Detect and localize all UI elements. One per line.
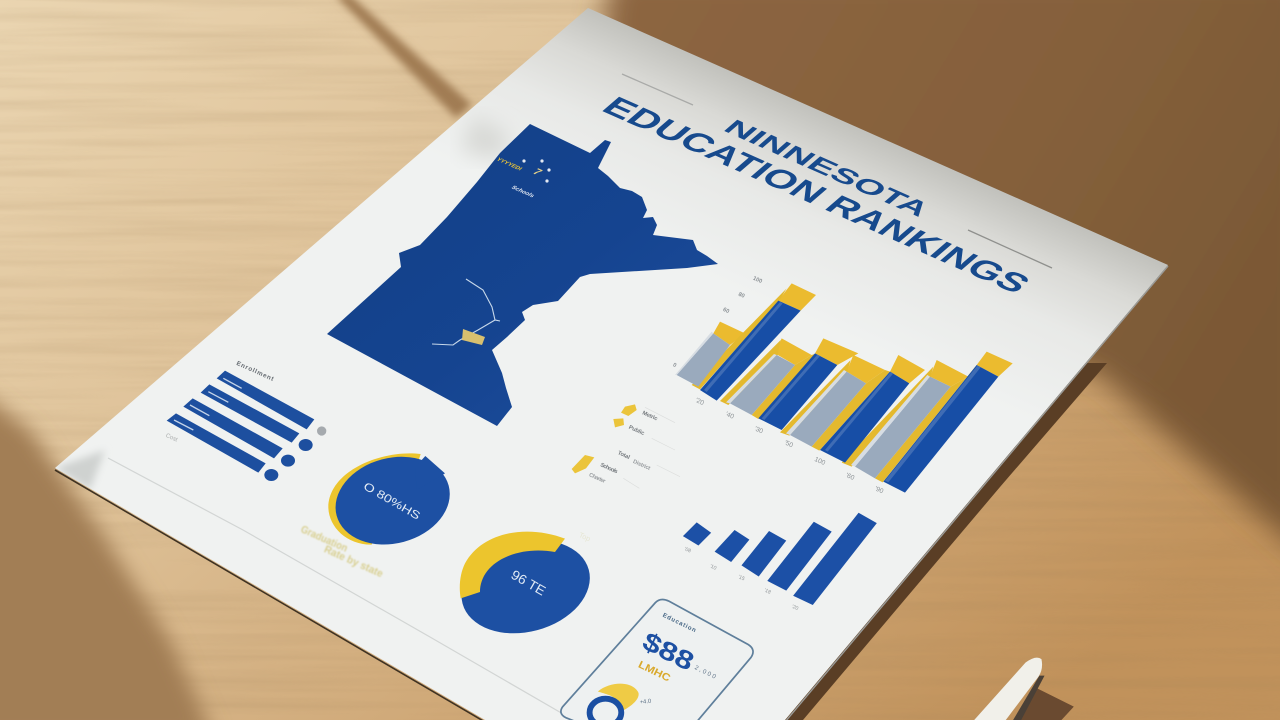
y axis labels: 60 (722, 307, 730, 315)
x axis labels: '30 (753, 425, 764, 435)
map legend text (494, 157, 551, 199)
blue bar highlights (704, 302, 981, 482)
title line 2: EDUCATION RANKINGS (595, 91, 1038, 299)
donut 2 yellow ring (460, 532, 565, 598)
legend text: Metric (641, 410, 658, 422)
grey bars (677, 333, 951, 478)
card small value: 2,000 (693, 664, 717, 681)
title (595, 91, 1038, 299)
map river lines (432, 279, 500, 345)
x axis labels: '90 (874, 485, 885, 495)
sheet bottom edge (55, 470, 485, 720)
bar highlights (675, 332, 930, 467)
legend swatches (572, 404, 637, 473)
shadow: paper right edge (785, 363, 1107, 720)
donut 1 blue disc (326, 444, 460, 557)
map legend text: YYYYEDI (494, 157, 523, 172)
pen (967, 658, 1074, 720)
donut 1 value: O 80%HS (361, 481, 422, 523)
legend text: Schools (599, 462, 618, 475)
pen body (967, 658, 1042, 720)
donut 1 yellow ring (328, 453, 421, 545)
donut 2 caption: Top (578, 530, 592, 543)
x axis labels: '50 (783, 439, 794, 449)
donut chart 1 (299, 444, 460, 580)
small column chart (683, 513, 877, 612)
card yellow arc (598, 684, 639, 711)
small column labels (683, 546, 799, 612)
shadow: dark area top right (600, 0, 1280, 560)
grouped bar chart (672, 276, 1013, 495)
y axis labels: 0 (672, 362, 677, 369)
shadow: bottom left (0, 385, 215, 720)
donut 1 caption (299, 523, 385, 580)
card outline (561, 599, 753, 720)
yellow bar caps (713, 283, 1013, 387)
donut chart 2 (451, 526, 600, 647)
card ring (590, 699, 621, 720)
card yellow label: LMHC (636, 659, 672, 685)
x axis labels: '40 (724, 411, 735, 421)
x axis labels: 100 (813, 456, 826, 467)
stat card (561, 599, 753, 720)
pen clip (1008, 676, 1045, 720)
bar highlights (174, 378, 242, 430)
donut 1 caption: Graduation (299, 523, 349, 555)
paper shade from table shadow (55, 115, 510, 490)
small column labels: '18 (763, 588, 772, 596)
axis label: Cost (165, 433, 179, 444)
small column labels: '20 (791, 604, 799, 612)
title line 1: NINNESOTA (717, 116, 936, 221)
legend text: District (632, 459, 651, 472)
shadow: streak top (335, 0, 472, 118)
small columns (683, 513, 877, 605)
bars (167, 371, 314, 473)
x axis labels: '60 (845, 472, 856, 482)
map city marker (462, 329, 485, 345)
donut 1 caption: Rate by state (322, 543, 385, 580)
donut 2 value: 96 TE (508, 567, 548, 599)
chart legend (572, 404, 680, 488)
blue bars (700, 301, 998, 493)
y axis labels (672, 276, 763, 369)
yellow side strips (692, 288, 977, 482)
legend text: Charter (588, 472, 607, 485)
small column labels: '15 (737, 574, 746, 582)
pen shadow (1014, 688, 1074, 720)
x axis labels: '20 (694, 397, 705, 407)
small column labels: '08 (683, 546, 692, 555)
bar end dots (264, 426, 326, 481)
legend text (588, 410, 658, 485)
horizontal bar chart (165, 360, 326, 481)
y axis labels: 80 (737, 292, 745, 300)
small column labels: '10 (709, 564, 717, 572)
legend text: Total (617, 450, 631, 461)
legend lines (623, 407, 680, 488)
map of Minnesota (327, 124, 718, 426)
map legend text: Schools (509, 185, 536, 199)
chart label: Enrollment (235, 360, 275, 383)
card big number: $88 (638, 626, 699, 677)
card note: +4.0 (639, 699, 652, 706)
map legend text: 7 (530, 167, 544, 177)
card heading: Education (661, 612, 697, 634)
y axis labels: 100 (752, 276, 763, 285)
legend text: Public (628, 425, 645, 437)
donut 2 blue disc (451, 526, 600, 647)
x axis labels (694, 397, 885, 495)
